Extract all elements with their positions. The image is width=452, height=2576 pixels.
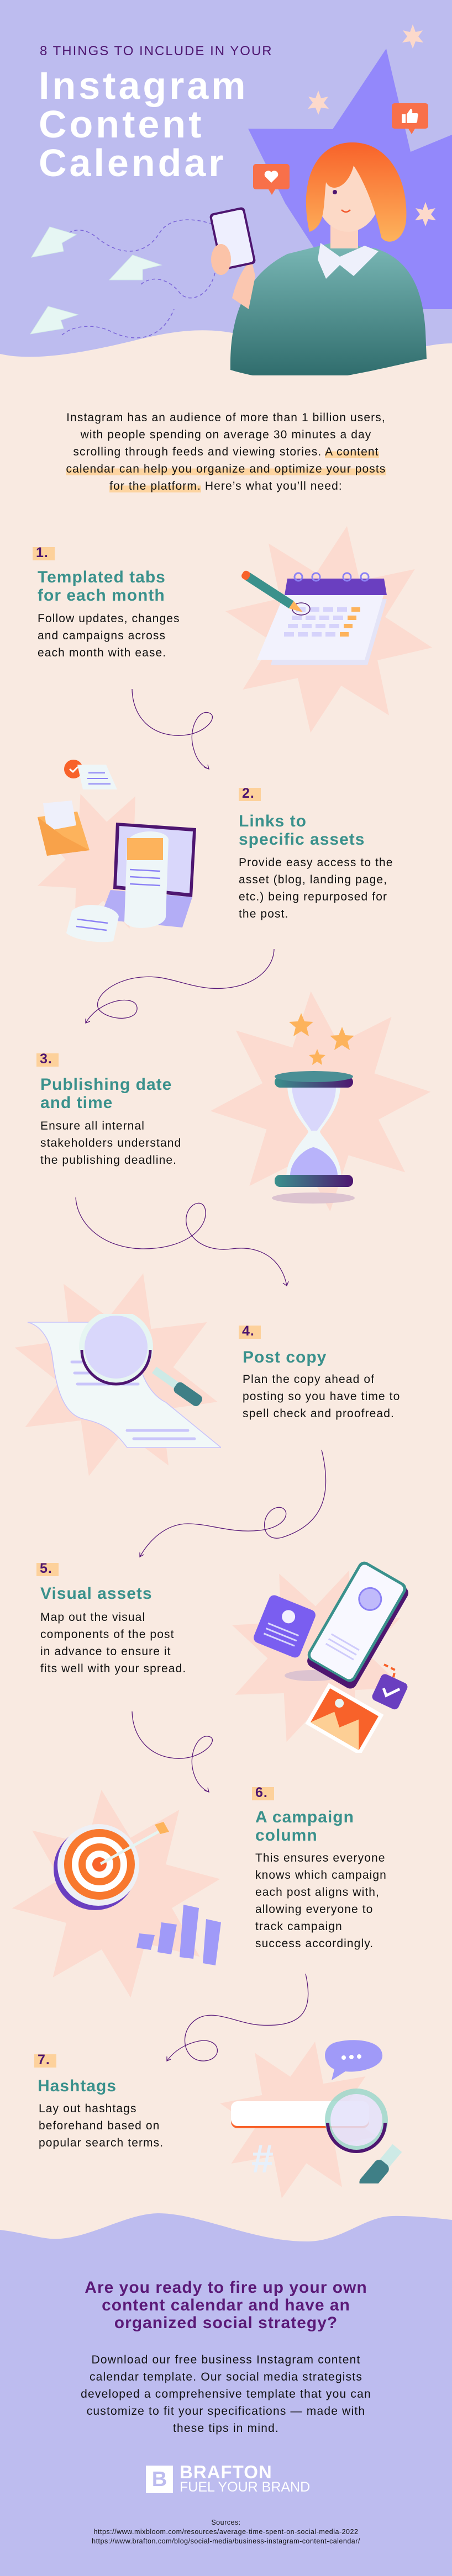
icon: heart bubble <box>253 164 290 195</box>
heading 3: Publishing date <box>40 1075 172 1094</box>
description 2: asset (blog, landing page, <box>239 873 387 886</box>
number 5: 5. <box>40 1561 52 1576</box>
intro text: Instagram has an audience of more than 1 billion users, <box>66 411 386 424</box>
number 7 <box>34 2054 56 2068</box>
footer paragraph: customize to fit your specifications — made with <box>87 2405 365 2417</box>
illustration: hourglass and stars <box>272 1013 355 1204</box>
icon: like bubble <box>392 103 428 134</box>
description 1: each month with ease. <box>38 646 166 659</box>
description 5: Map out the visual <box>40 1611 145 1623</box>
number 4 <box>239 1326 261 1339</box>
footer heading: Are you ready to fire up your own <box>85 2278 367 2297</box>
description 5: in advance to ensure it <box>40 1645 171 1657</box>
number 2 <box>239 788 261 801</box>
logo: Brafton: BRAFTON <box>180 2462 272 2482</box>
title: Calendar <box>39 141 227 184</box>
heading 3: and time <box>40 1094 113 1112</box>
item 3 <box>36 1051 181 1166</box>
heading 1 <box>38 568 166 604</box>
intro text: calendar can help you organize and optimize your posts <box>66 463 386 475</box>
logo: Brafton: B <box>152 2468 167 2491</box>
description 6 <box>255 1852 387 1950</box>
description 7 <box>39 2102 164 2149</box>
sources: Sources: <box>211 2519 241 2526</box>
intro text <box>66 411 386 492</box>
illustration: target and bar chart <box>54 1822 221 1965</box>
heading 3 <box>40 1075 172 1112</box>
description 1 <box>38 612 180 659</box>
item 2 <box>239 786 393 920</box>
number 2: 2. <box>242 786 255 801</box>
illustration: paper planes <box>30 219 216 338</box>
illustration: calendar and pencil <box>241 571 387 665</box>
intro text: for the platform. Here’s what you’ll need: <box>109 479 343 492</box>
number 4: 4. <box>242 1323 255 1339</box>
sources <box>92 2519 360 2545</box>
number 3: 3. <box>40 1051 52 1067</box>
item 7 <box>34 2052 164 2149</box>
illustration: document with magnifier <box>28 1314 221 1448</box>
item 6 <box>252 1785 387 1950</box>
arrows: connector curves <box>75 689 326 2061</box>
illustration: woman with phone <box>210 142 427 375</box>
intro text: with people spending on average 30 minutes a day <box>81 428 371 441</box>
description 3: the publishing deadline. <box>40 1154 177 1166</box>
item 4 <box>239 1323 400 1420</box>
description 5: fits well with your spread. <box>40 1662 186 1675</box>
heading 5: Visual assets <box>40 1584 153 1602</box>
subtitle: 8 THINGS TO INCLUDE IN YOUR <box>40 44 273 59</box>
number 6 <box>252 1787 274 1800</box>
title: Instagram <box>39 64 249 107</box>
description 4: Plan the copy ahead of <box>243 1372 375 1386</box>
heading 4: Post copy <box>243 1348 327 1366</box>
item 1 <box>33 545 180 659</box>
number 3 <box>36 1053 59 1067</box>
header background <box>0 0 452 357</box>
description 6: This ensures everyone <box>255 1852 386 1864</box>
description 6: success accordingly. <box>255 1937 374 1950</box>
description 6: allowing everyone to <box>255 1902 373 1916</box>
footer heading: content calendar and have an <box>102 2296 350 2314</box>
number 6: 6. <box>255 1785 268 1800</box>
number 7: 7. <box>38 2052 50 2068</box>
description 3: stakeholders understand <box>40 1136 181 1149</box>
heading 6 <box>255 1808 354 1844</box>
heading 2 <box>239 812 365 849</box>
footer heading <box>85 2278 367 2332</box>
illustration: phone, profile card, image, check <box>254 1561 408 1753</box>
illustration: search bar, magnifier, bubble, hashtag: # <box>251 2137 274 2181</box>
footer paragraph: calendar template. Our social media strategists <box>90 2371 362 2383</box>
footer heading: organized social strategy? <box>114 2314 338 2332</box>
description 5: components of the post <box>40 1628 175 1641</box>
description 5 <box>40 1611 186 1675</box>
description 3 <box>40 1120 181 1166</box>
description 7: popular search terms. <box>39 2137 164 2149</box>
logo: Brafton <box>146 2462 310 2495</box>
description 4 <box>243 1372 400 1420</box>
description 4: posting so you have time to <box>243 1390 400 1402</box>
footer paragraph: developed a comprehensive template that you can <box>81 2387 371 2400</box>
description 2 <box>239 856 393 920</box>
heading 1: for each month <box>38 586 165 604</box>
footer background <box>0 2213 452 2576</box>
illustration: laptop, envelope and documents <box>38 760 196 942</box>
number 1: 1. <box>36 545 49 560</box>
illustration: search bar, magnifier, bubble, hashtag <box>231 2040 402 2183</box>
heading 2: Links to <box>239 812 307 830</box>
description 1: and campaigns across <box>38 629 166 642</box>
footer paragraph: Download our free business Instagram content <box>91 2353 361 2366</box>
description 3: Ensure all internal <box>40 1120 145 1132</box>
description 7: beforehand based on <box>39 2119 160 2132</box>
heading 6: column <box>255 1826 318 1844</box>
decorative bursts <box>12 526 432 2198</box>
heading 6: A campaign <box>255 1808 354 1826</box>
icon: sparkles <box>308 24 436 226</box>
description 2: etc.) being repurposed for <box>239 890 387 903</box>
title: Content <box>39 103 204 146</box>
number 5 <box>36 1563 59 1576</box>
intro text: scrolling through feeds and viewing stories. A content <box>73 445 379 458</box>
title <box>39 64 249 184</box>
description 7: Lay out hashtags <box>39 2102 137 2114</box>
description 1: Follow updates, changes <box>38 612 180 625</box>
description 6: knows which campaign <box>255 1868 387 1881</box>
description 2: the post. <box>239 908 288 920</box>
item 5 <box>36 1561 186 1675</box>
description 4: spell check and proofread. <box>243 1407 395 1420</box>
heading 7: Hashtags <box>38 2077 117 2095</box>
heading 2: specific assets <box>239 830 365 849</box>
description 6: each post aligns with, <box>255 1886 380 1898</box>
sources: https://www.brafton.com/blog/social-media/business-instagram-content-calendar/ <box>92 2537 360 2545</box>
footer paragraph <box>81 2353 371 2435</box>
heading 1: Templated tabs <box>38 568 166 586</box>
description 6: track campaign <box>255 1920 343 1932</box>
description 2: Provide easy access to the <box>239 856 393 869</box>
number 1 <box>33 547 55 560</box>
logo: Brafton: FUEL YOUR BRAND <box>180 2479 310 2495</box>
footer paragraph: these tips in mind. <box>173 2421 279 2435</box>
sources: https://www.mixbloom.com/resources/average-time-spent-on-social-media-2022 <box>94 2528 358 2536</box>
